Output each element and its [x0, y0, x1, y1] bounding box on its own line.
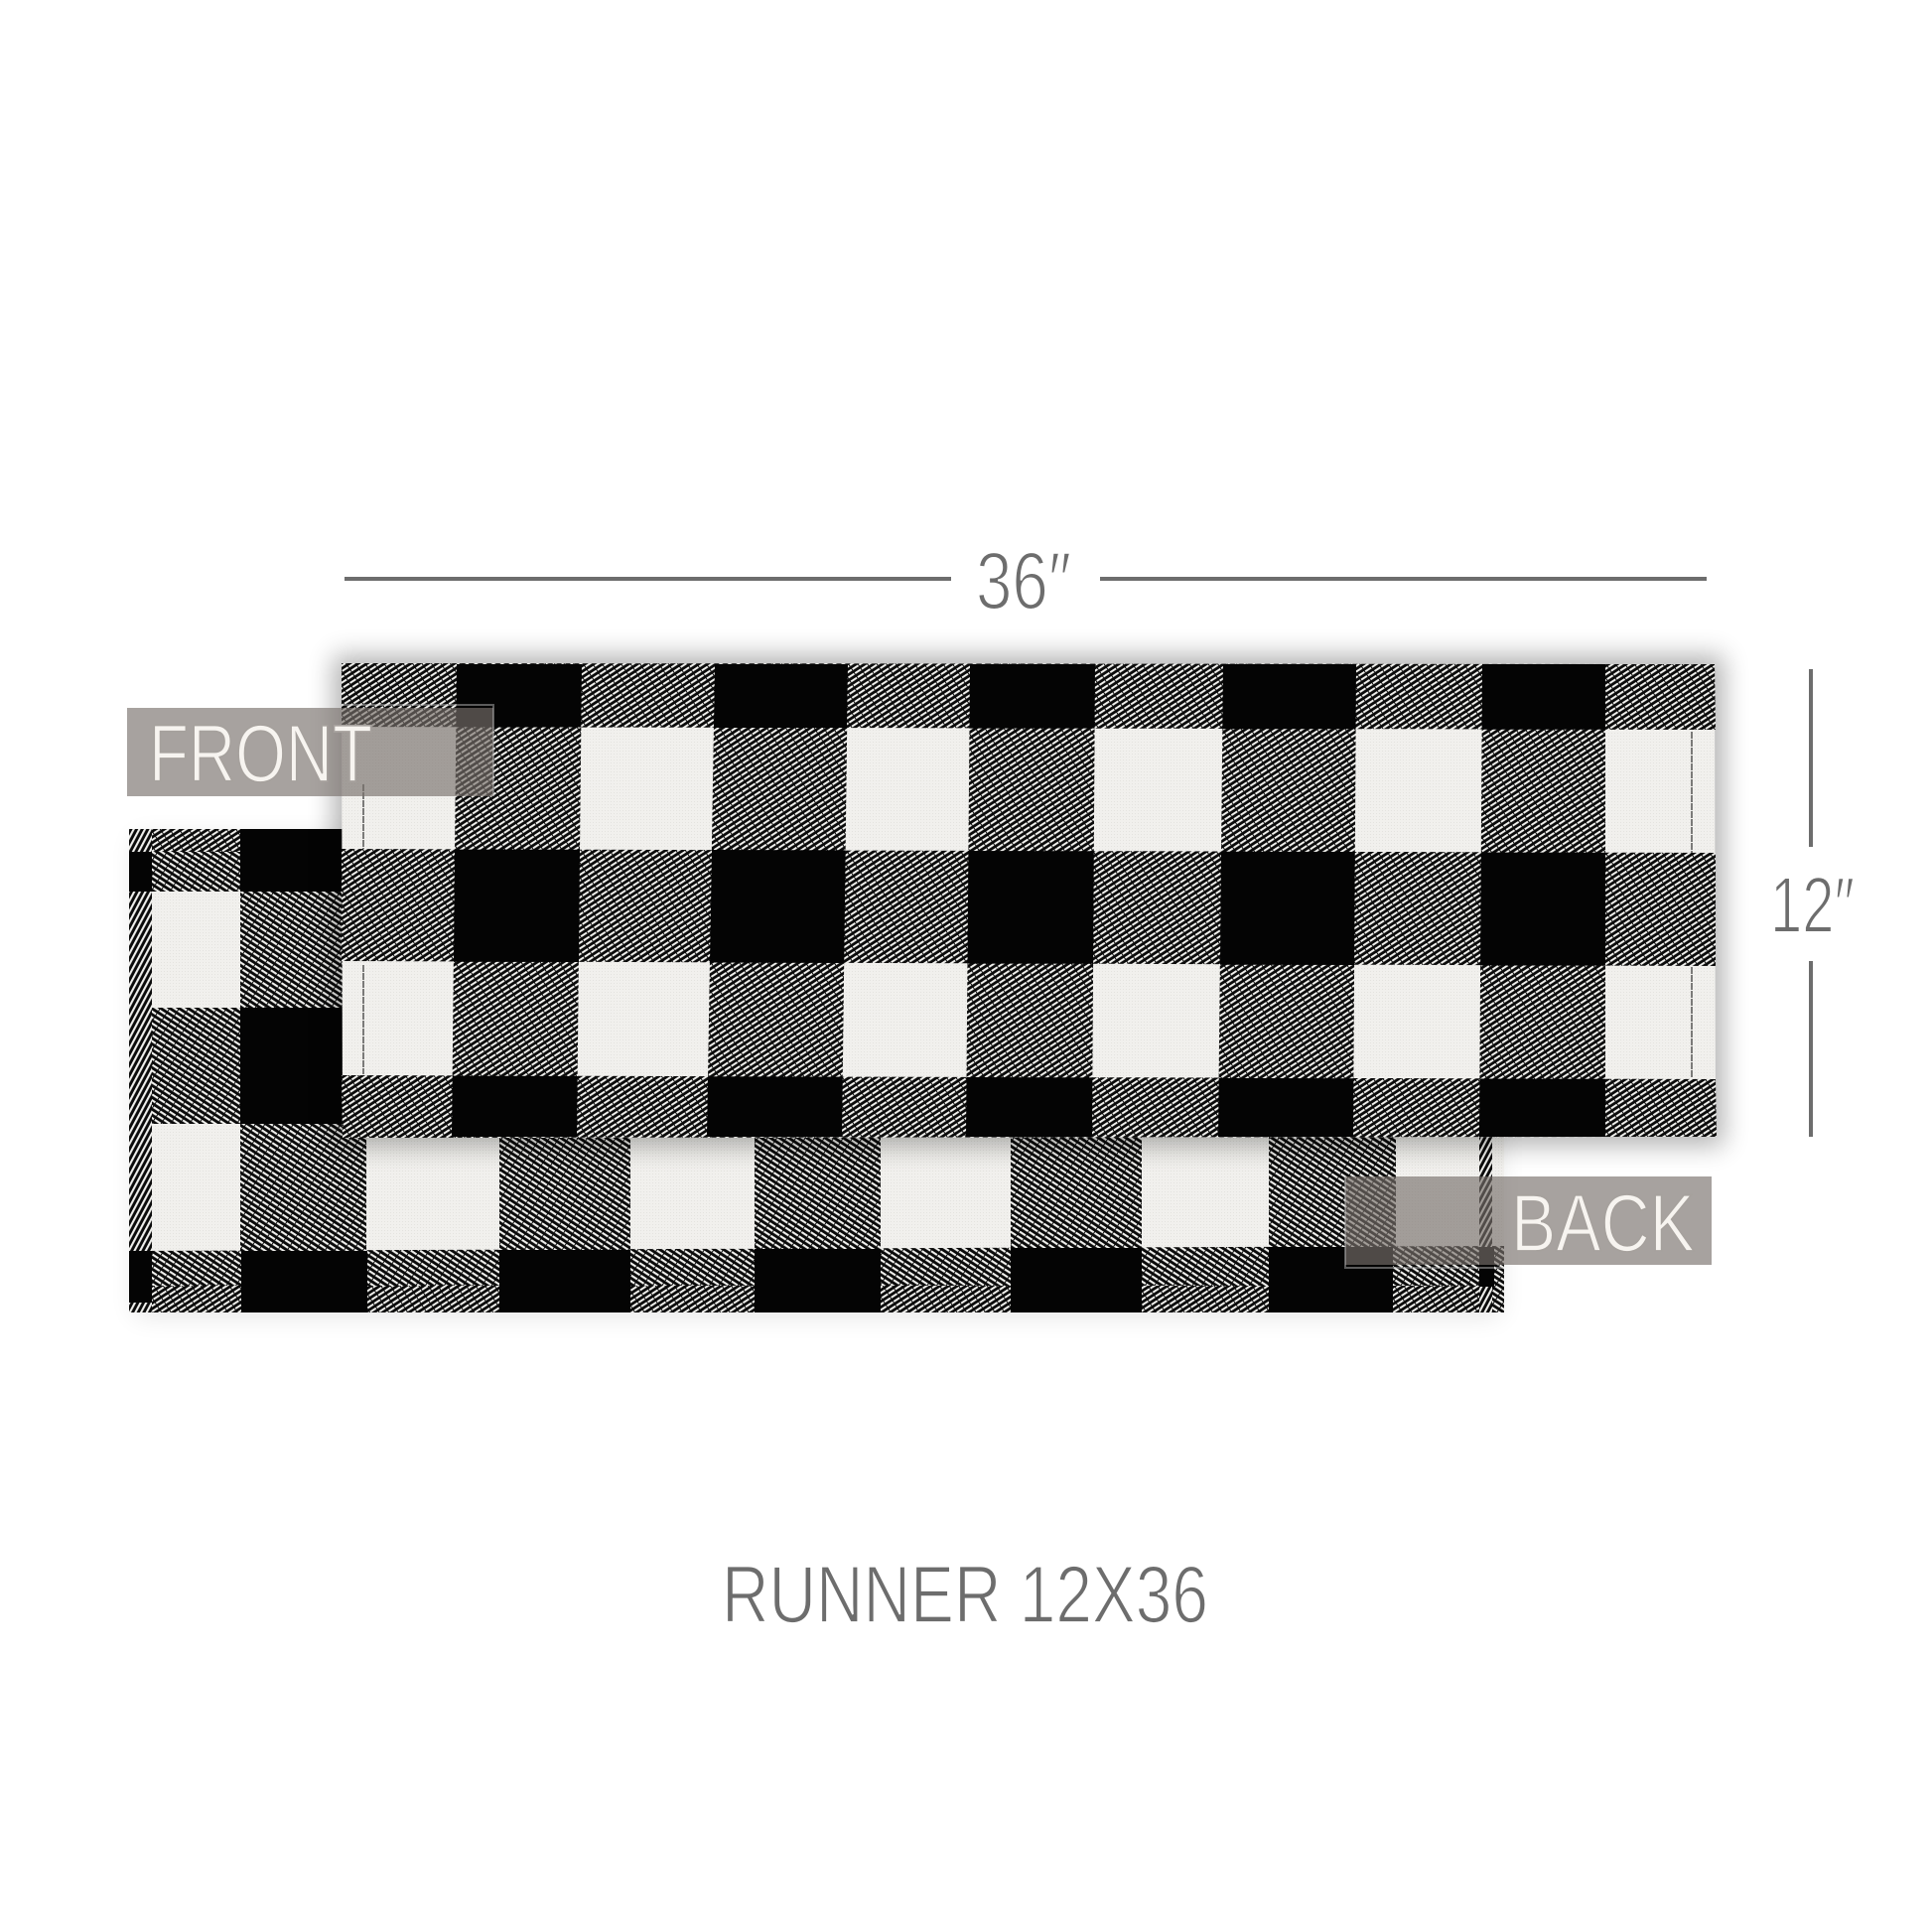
caption: RUNNER 12X36: [722, 1550, 1208, 1640]
dimension: height 12 inches: [1770, 669, 1855, 1137]
dimension: width 36 inches: [345, 536, 1707, 626]
panel: back runner: [129, 829, 1504, 1316]
panel: front runner: [334, 655, 1724, 1146]
label: FRONT: FRONT: [149, 709, 372, 799]
label: BACK: BACK: [1511, 1178, 1695, 1269]
dimension: width 36 inches: 36″: [976, 536, 1071, 626]
label: BACK: [1345, 1176, 1712, 1269]
dimension: height 12 inches: 12″: [1770, 861, 1855, 949]
